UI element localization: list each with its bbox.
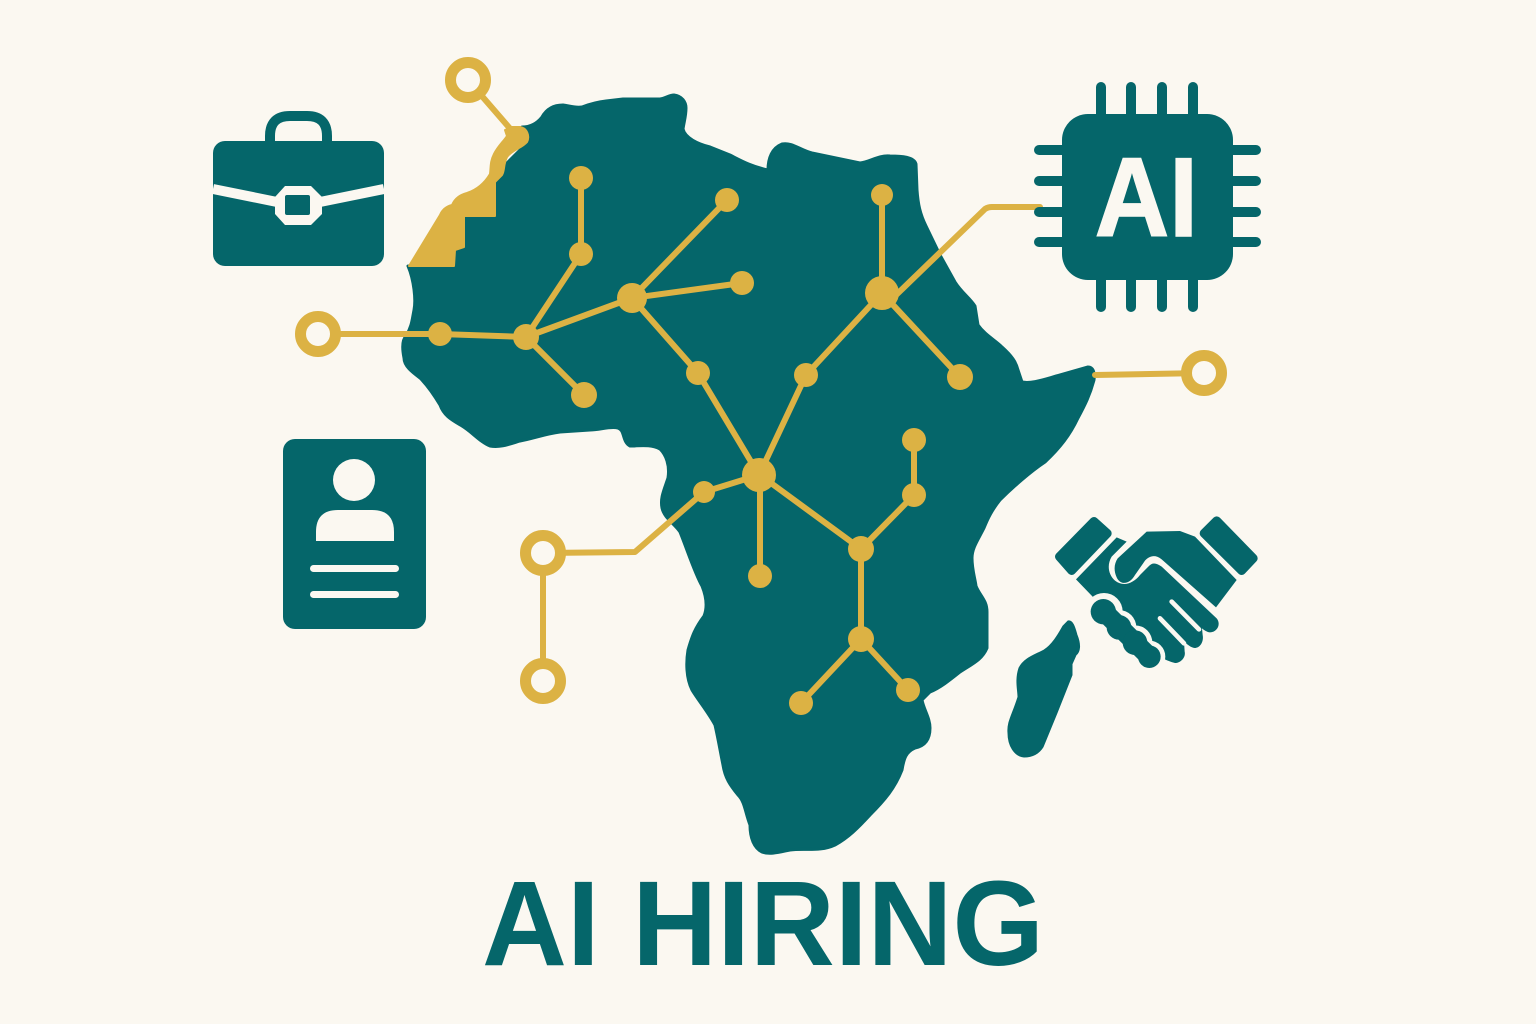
network: connector lines xyxy=(318,80,1204,703)
icon: AI chip xyxy=(1039,87,1256,307)
map: Africa silhouette xyxy=(403,95,1094,853)
icon: briefcase xyxy=(213,116,384,266)
icon: candidate ID card xyxy=(283,439,426,629)
network: ring endpoints xyxy=(300,62,1222,698)
map: Madagascar xyxy=(1008,621,1080,757)
icon: handshake xyxy=(1059,521,1253,673)
highlighted region: north-west coast xyxy=(409,127,528,266)
chip label: AI xyxy=(1095,135,1198,260)
title: AI HIRING xyxy=(482,855,1044,991)
network: solid nodes xyxy=(428,166,973,715)
